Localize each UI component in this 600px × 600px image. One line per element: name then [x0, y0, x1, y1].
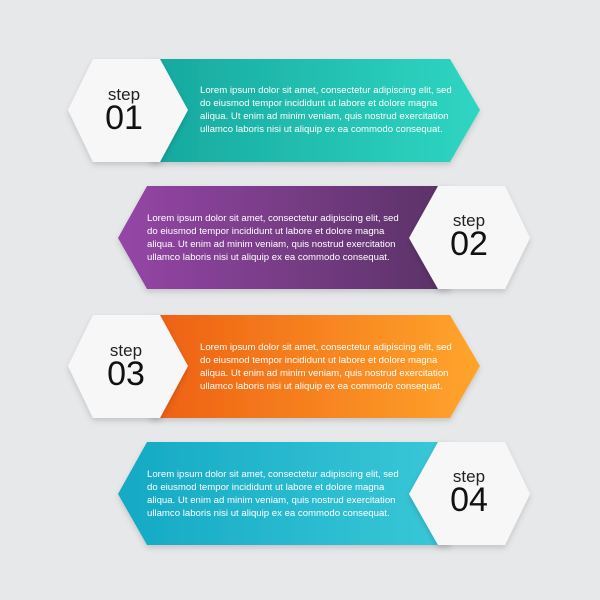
text 02: aliqua. Ut enim ad minim veniam, quis nostrud exercitation	[147, 239, 396, 250]
label 03: step	[110, 341, 142, 360]
label 01: 01	[105, 99, 143, 137]
text 02: ullamco laboris nisi ut aliquip ex ea commodo consequat.	[147, 252, 390, 263]
text 01: aliqua. Ut enim ad minim veniam, quis nostrud exercitation	[200, 111, 448, 122]
arrow band 02	[118, 186, 450, 289]
text 04: Lorem ipsum dolor sit amet, consectetur adipiscing elit, sed	[147, 469, 399, 480]
text 02: do eiusmod tempor incididunt ut labore et dolore magna	[147, 226, 385, 237]
text 03: ullamco laboris nisi ut aliquip ex ea commodo consequat.	[200, 381, 443, 392]
label 02: 02	[450, 225, 488, 263]
label 03: 03	[107, 355, 145, 393]
text 04: aliqua. Ut enim ad minim veniam, quis nostrud exercitation	[147, 495, 396, 506]
label 04: step	[453, 467, 485, 486]
panel: step 01	[68, 59, 480, 162]
panel: step 03	[68, 315, 480, 418]
text 01: do eiusmod tempor incididunt ut labore et dolore magna	[200, 98, 438, 109]
arrow band 04	[118, 442, 450, 545]
panel: step 02	[118, 186, 530, 289]
text 03: aliqua. Ut enim ad minim veniam, quis nostrud exercitation	[200, 368, 448, 379]
hexagon 02	[409, 186, 530, 289]
label 01: step	[108, 85, 140, 104]
hexagon 01	[68, 59, 188, 162]
label 02: step	[453, 211, 485, 230]
text 03: Lorem ipsum dolor sit amet, consectetur adipiscing elit, sed	[200, 342, 452, 353]
hexagon 04	[409, 442, 530, 545]
hexagon 03	[68, 315, 188, 418]
text 04: ullamco laboris nisi ut aliquip ex ea commodo consequat.	[147, 508, 390, 519]
text 02: Lorem ipsum dolor sit amet, consectetur adipiscing elit, sed	[147, 213, 399, 224]
text 01: ullamco laboris nisi ut aliquip ex ea commodo consequat.	[200, 124, 443, 135]
arrow band 03	[150, 315, 480, 418]
arrow band 01	[150, 59, 480, 162]
panel: step 04	[118, 442, 530, 545]
label 04: 04	[450, 481, 488, 519]
text 03: do eiusmod tempor incididunt ut labore et dolore magna	[200, 355, 438, 366]
text 04: do eiusmod tempor incididunt ut labore et dolore magna	[147, 482, 385, 493]
text 01: Lorem ipsum dolor sit amet, consectetur adipiscing elit, sed	[200, 85, 452, 96]
